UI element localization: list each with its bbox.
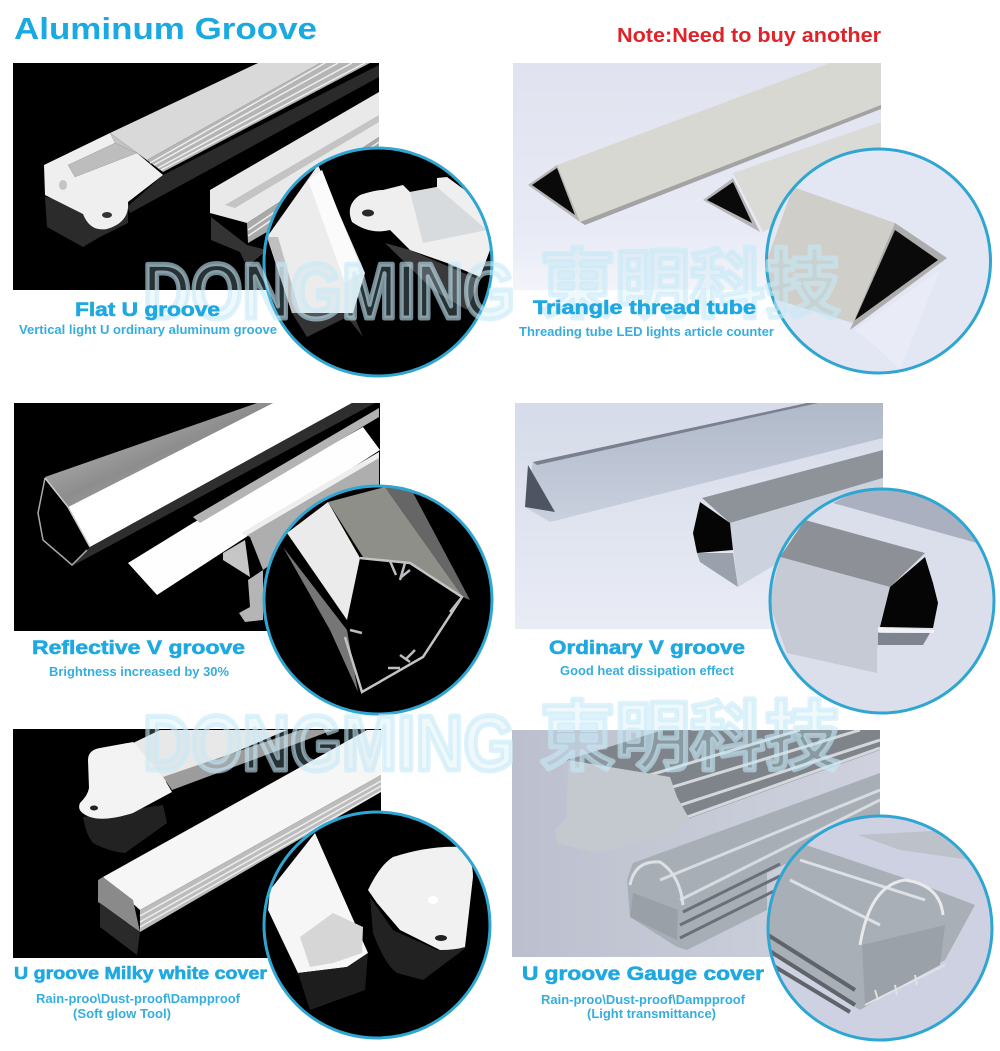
title: Aluminum Groove (14, 11, 317, 46)
caption: U groove milky white cover: (Soft glow Tool) (73, 1007, 171, 1021)
heading: flat U groove: Flat U groove (75, 300, 220, 321)
watermark: upper: DONGMING (143, 247, 515, 335)
product photo: flat U groove (13, 63, 379, 290)
caption: ordinary V groove: Good heat dissipation effect (560, 664, 735, 678)
caption: U groove milky white cover (36, 992, 241, 1021)
caption: U groove gauge cover (541, 993, 746, 1021)
caption: flat U groove: Vertical light U ordinary aluminum groove (19, 323, 277, 337)
zoom circle: U groove milky white cover (264, 812, 490, 1038)
heading: U groove gauge cover: U groove Gauge cover (522, 964, 765, 985)
panel: U groove gauge cover (512, 730, 992, 1040)
zoom circle: triangle thread tube (766, 149, 990, 373)
product photo: U groove gauge cover (512, 730, 880, 957)
product photo: U groove milky white cover (13, 729, 381, 958)
zoom circle: reflective V groove (264, 486, 492, 714)
watermark: lower: 東明科技 (540, 695, 840, 779)
note: Note:Need to buy another (617, 25, 881, 47)
caption: U groove gauge cover: (Light transmittance) (587, 1007, 716, 1021)
caption: triangle thread tube: Threading tube LED lights article counter (519, 325, 774, 339)
panel: triangle thread tube (513, 63, 990, 373)
product photo: triangle thread tube (513, 63, 881, 290)
caption: reflective V groove: Brightness increased by 30% (49, 665, 229, 679)
zoom circle: U groove gauge cover (768, 816, 992, 1040)
caption: U groove milky white cover: Rain-proo\Dust-proof\Dampproof (36, 992, 241, 1006)
panel: U groove milky white cover (13, 729, 490, 1038)
product photo: reflective V groove (14, 403, 380, 631)
panel: ordinary V groove (515, 403, 994, 713)
heading: U groove milky white cover: U groove Milky white cover (14, 963, 267, 983)
watermark: lower (143, 695, 840, 787)
zoom circle: ordinary V groove (769, 480, 994, 713)
heading: triangle thread tube: Triangle thread tube (533, 298, 756, 319)
caption: U groove gauge cover: Rain-proo\Dust-proof\Dampproof (541, 993, 746, 1007)
zoom circle: flat U groove (264, 148, 492, 376)
heading: ordinary V groove: Ordinary V groove (549, 638, 745, 659)
heading: reflective V groove: Reflective V groove (32, 638, 245, 659)
watermark: upper: 東明科技 (540, 243, 840, 327)
product photo: ordinary V groove (515, 403, 883, 629)
panel: flat U groove (13, 63, 492, 376)
watermark: lower: DONGMING (143, 699, 515, 787)
panel: reflective V groove (14, 403, 492, 714)
watermark: upper (143, 243, 840, 335)
